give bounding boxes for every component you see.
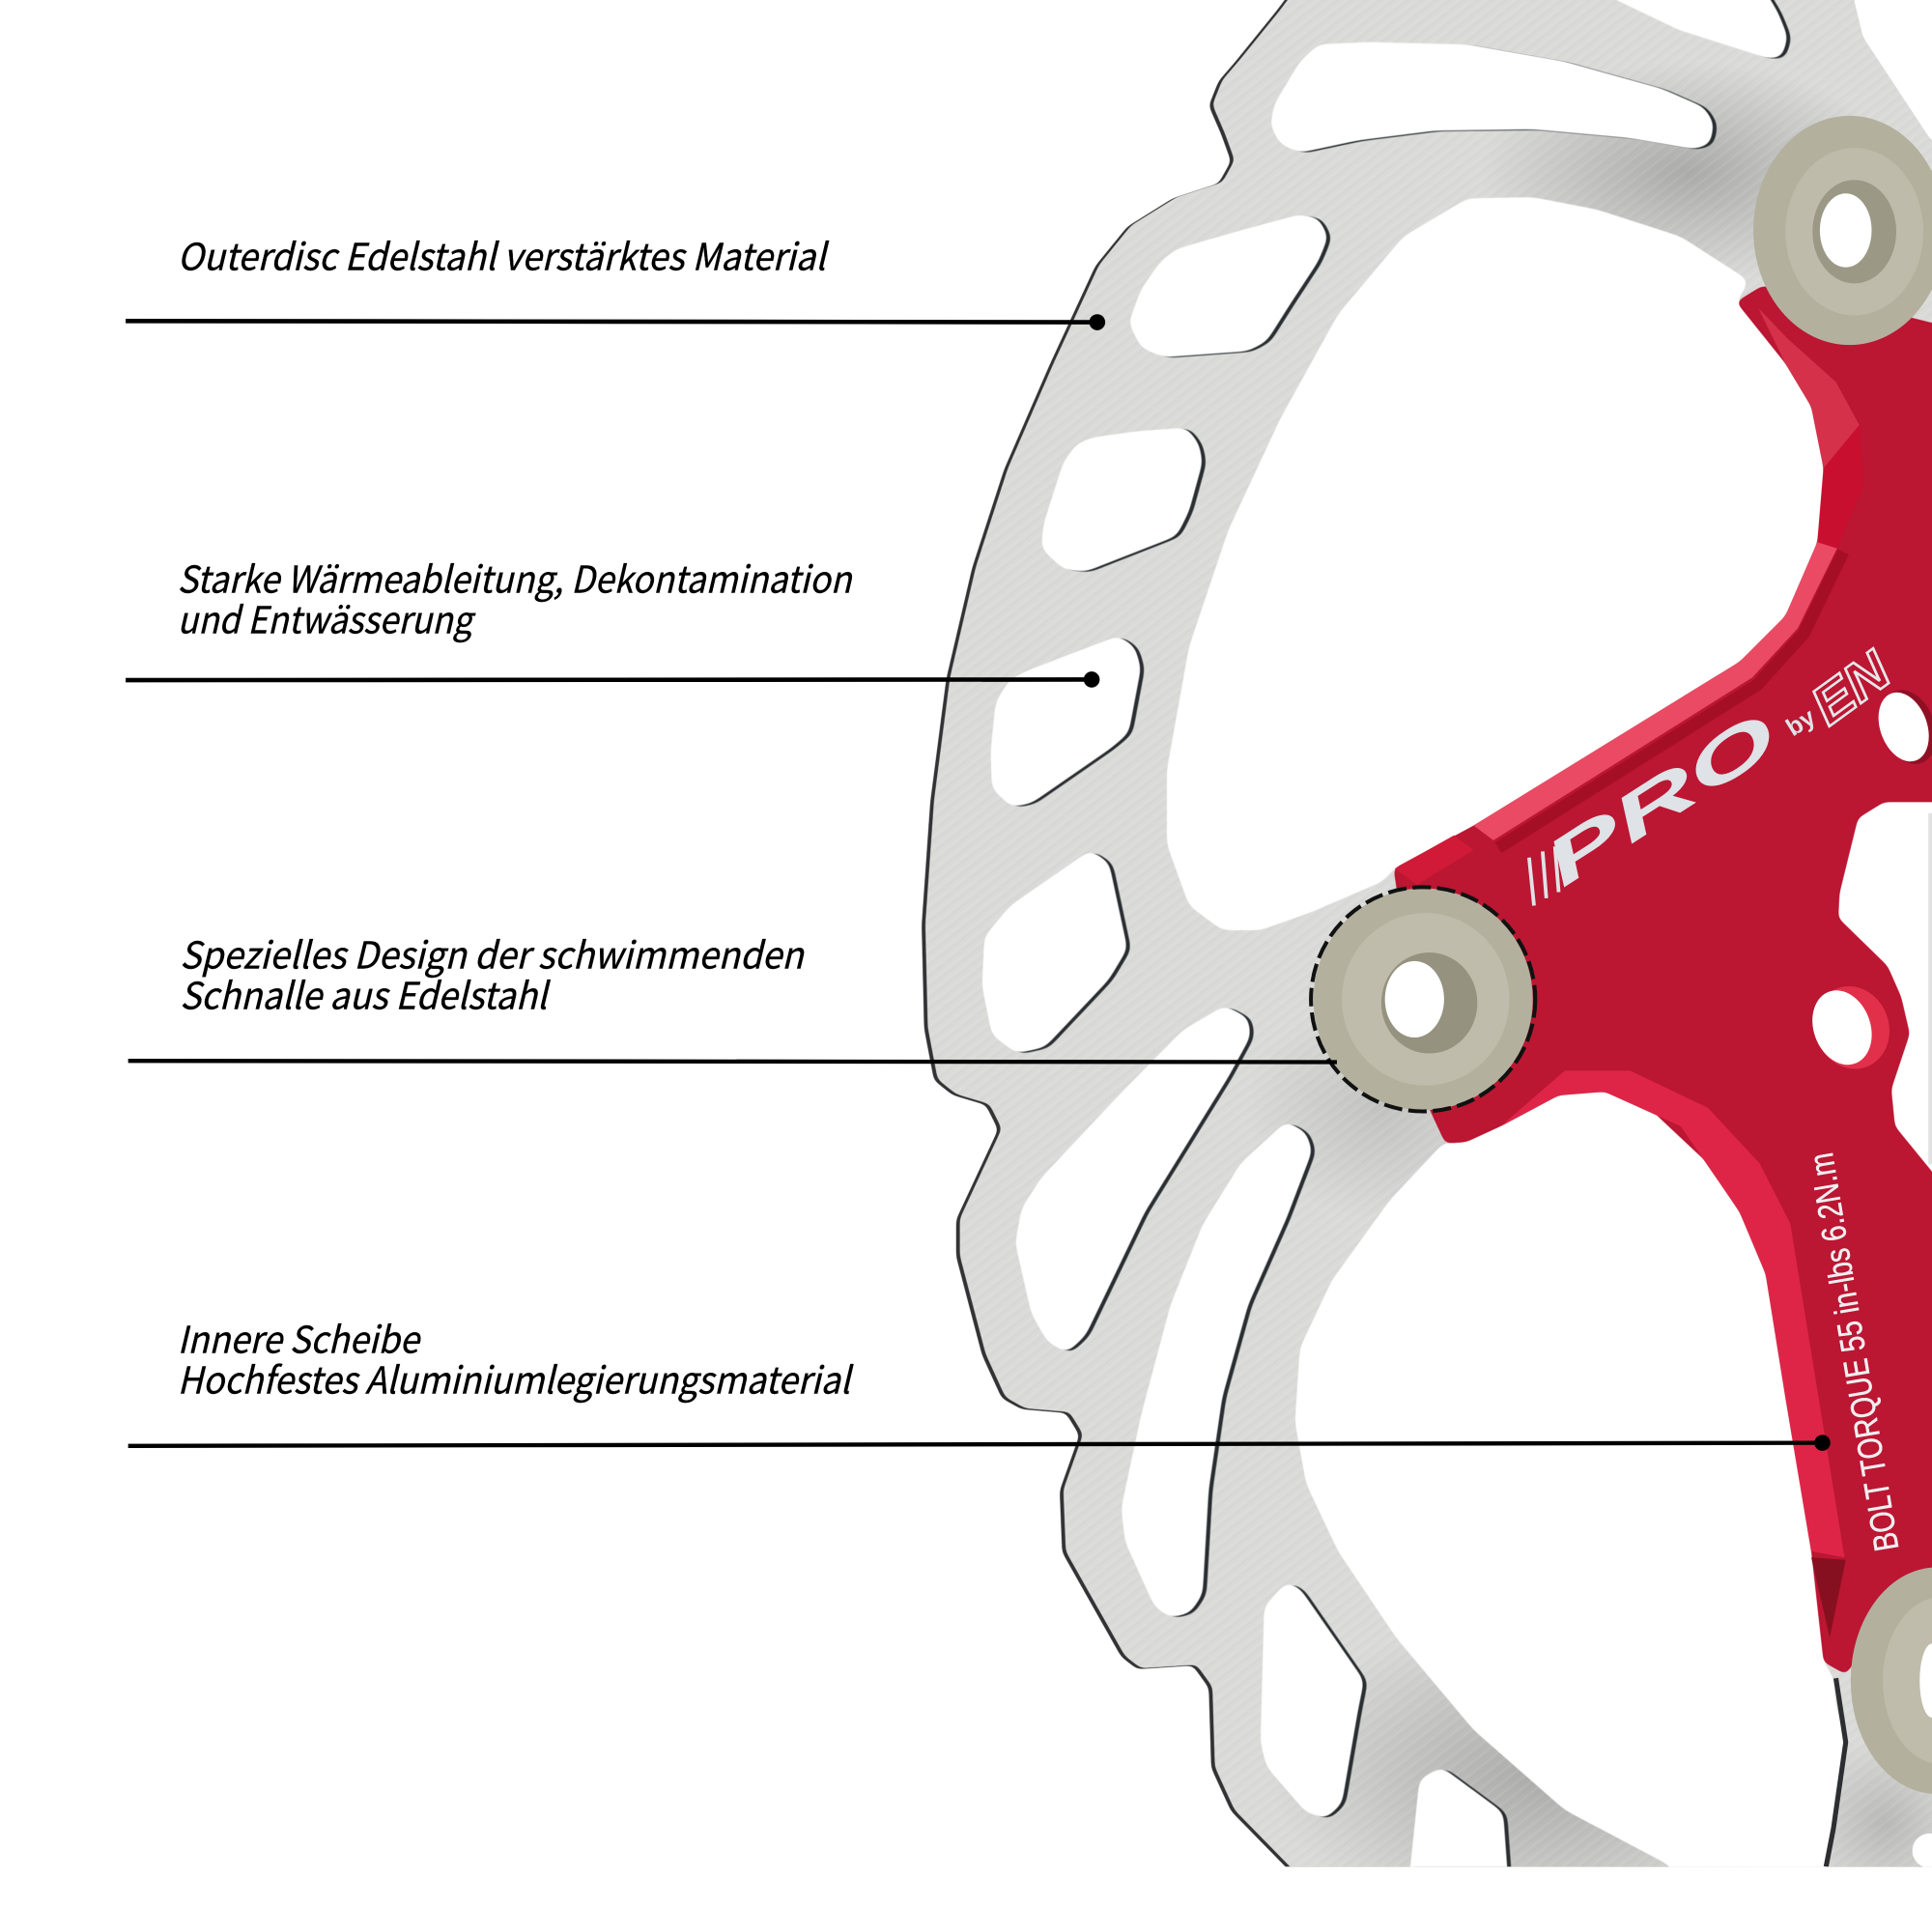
logo word PRO: PRO — [1531, 699, 1790, 900]
washer: bottom — [1851, 1567, 1932, 1794]
red aluminium spider — [1394, 286, 1932, 1674]
logo stripes — [1529, 846, 1559, 906]
inner window upper — [1167, 197, 1824, 930]
logo word by: by — [1781, 703, 1821, 742]
washer: top — [1753, 116, 1932, 345]
callout ring: floating buckle — [1311, 887, 1535, 1112]
spider hole lower — [1803, 976, 1901, 1080]
label text line 2: Hochfestes Aluminiumlegierungsmaterial — [178, 1352, 854, 1406]
bevel: upper arm — [1474, 542, 1837, 840]
hub opening — [1838, 802, 1932, 1172]
bevel: dark side — [1817, 425, 1863, 549]
outer steel rotor — [925, 0, 1932, 1897]
leader line — [126, 321, 1096, 323]
label text: Outerdisc Edelstahl verstärktes Material — [178, 228, 830, 281]
bevel: left corner — [1395, 836, 1474, 885]
leader line — [128, 1443, 1822, 1446]
callout 3: floating buckle — [128, 927, 1337, 1062]
inner window lower — [1295, 1092, 1846, 1897]
label text: Spezielles Design der schwimmenden — [180, 927, 805, 980]
logo: PRO by EN — [1529, 639, 1902, 906]
brake disc illustration — [922, 0, 1932, 1932]
washer: centre — [1314, 889, 1533, 1110]
logo word EN: EN — [1800, 639, 1902, 736]
label text line 2: Schnalle aus Edelstahl — [180, 968, 551, 1021]
label text line 2: und Entwässerung — [178, 592, 476, 645]
callout 1: outer disc — [126, 228, 1105, 330]
corner cut bottom right — [1913, 1833, 1932, 1868]
leader dot — [1814, 1435, 1831, 1451]
spider engraving: bolt torque: BOLT TORQUE 55 in-lbs 6.2N.m — [1802, 1151, 1906, 1554]
spider hole upper — [1878, 690, 1932, 764]
leader dot — [1090, 314, 1105, 330]
bevel: dark tip — [1811, 1557, 1846, 1637]
spider body — [1394, 286, 1932, 1674]
leader line — [128, 1061, 1337, 1062]
label text: Innere Scheibe — [178, 1312, 421, 1365]
callout 4: inner disc — [128, 1312, 1831, 1451]
dark edge lower right — [1826, 1678, 1846, 1866]
label text: Starke Wärmeableitung, Dekontamination — [178, 552, 853, 605]
hub edge line — [1928, 813, 1932, 1164]
leader line — [126, 678, 1092, 682]
bevel: lower arm — [1501, 1070, 1844, 1557]
bevel: top curve — [1758, 308, 1860, 469]
callout 2: heat dissipation — [126, 552, 1099, 688]
leader dot — [1084, 671, 1099, 688]
bevel shade: upper arm — [1498, 552, 1843, 848]
